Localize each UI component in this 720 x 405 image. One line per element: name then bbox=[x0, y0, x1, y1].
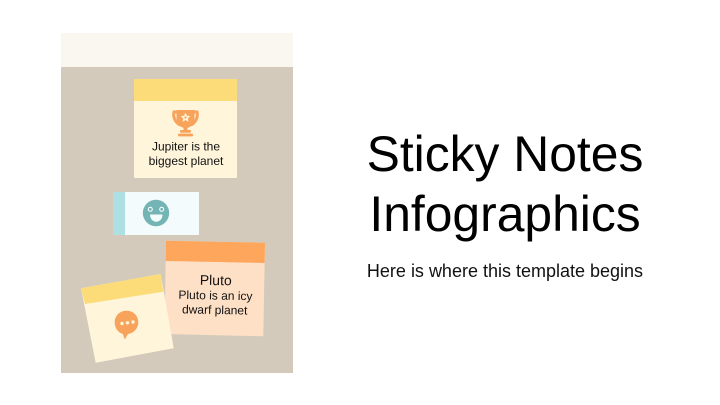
panel: corkboard background bbox=[61, 33, 293, 373]
text: Pluto note: dwarf planet bbox=[182, 302, 248, 318]
text: Pluto note: Pluto bbox=[200, 272, 232, 288]
title: Sticky Notes bbox=[367, 126, 643, 182]
panel: tilted yellow sticky note bbox=[81, 274, 174, 363]
icon: smiley face bbox=[143, 200, 169, 226]
text: Jupiter note: biggest planet bbox=[149, 154, 224, 168]
text: Pluto note bbox=[178, 271, 253, 318]
panel: Pluto sticky note bbox=[164, 241, 265, 336]
subtitle: Here is where this template begins bbox=[367, 261, 643, 281]
icon: speech bubble bbox=[115, 311, 138, 340]
text: Pluto note: Pluto is an icy bbox=[178, 288, 253, 303]
panel: blue sticky note bbox=[113, 192, 199, 235]
panel: Jupiter sticky note bbox=[134, 79, 237, 178]
text: Jupiter note: Jupiter is the bbox=[152, 140, 220, 154]
icon: trophy bbox=[174, 110, 197, 136]
title: Infographics bbox=[369, 186, 641, 242]
